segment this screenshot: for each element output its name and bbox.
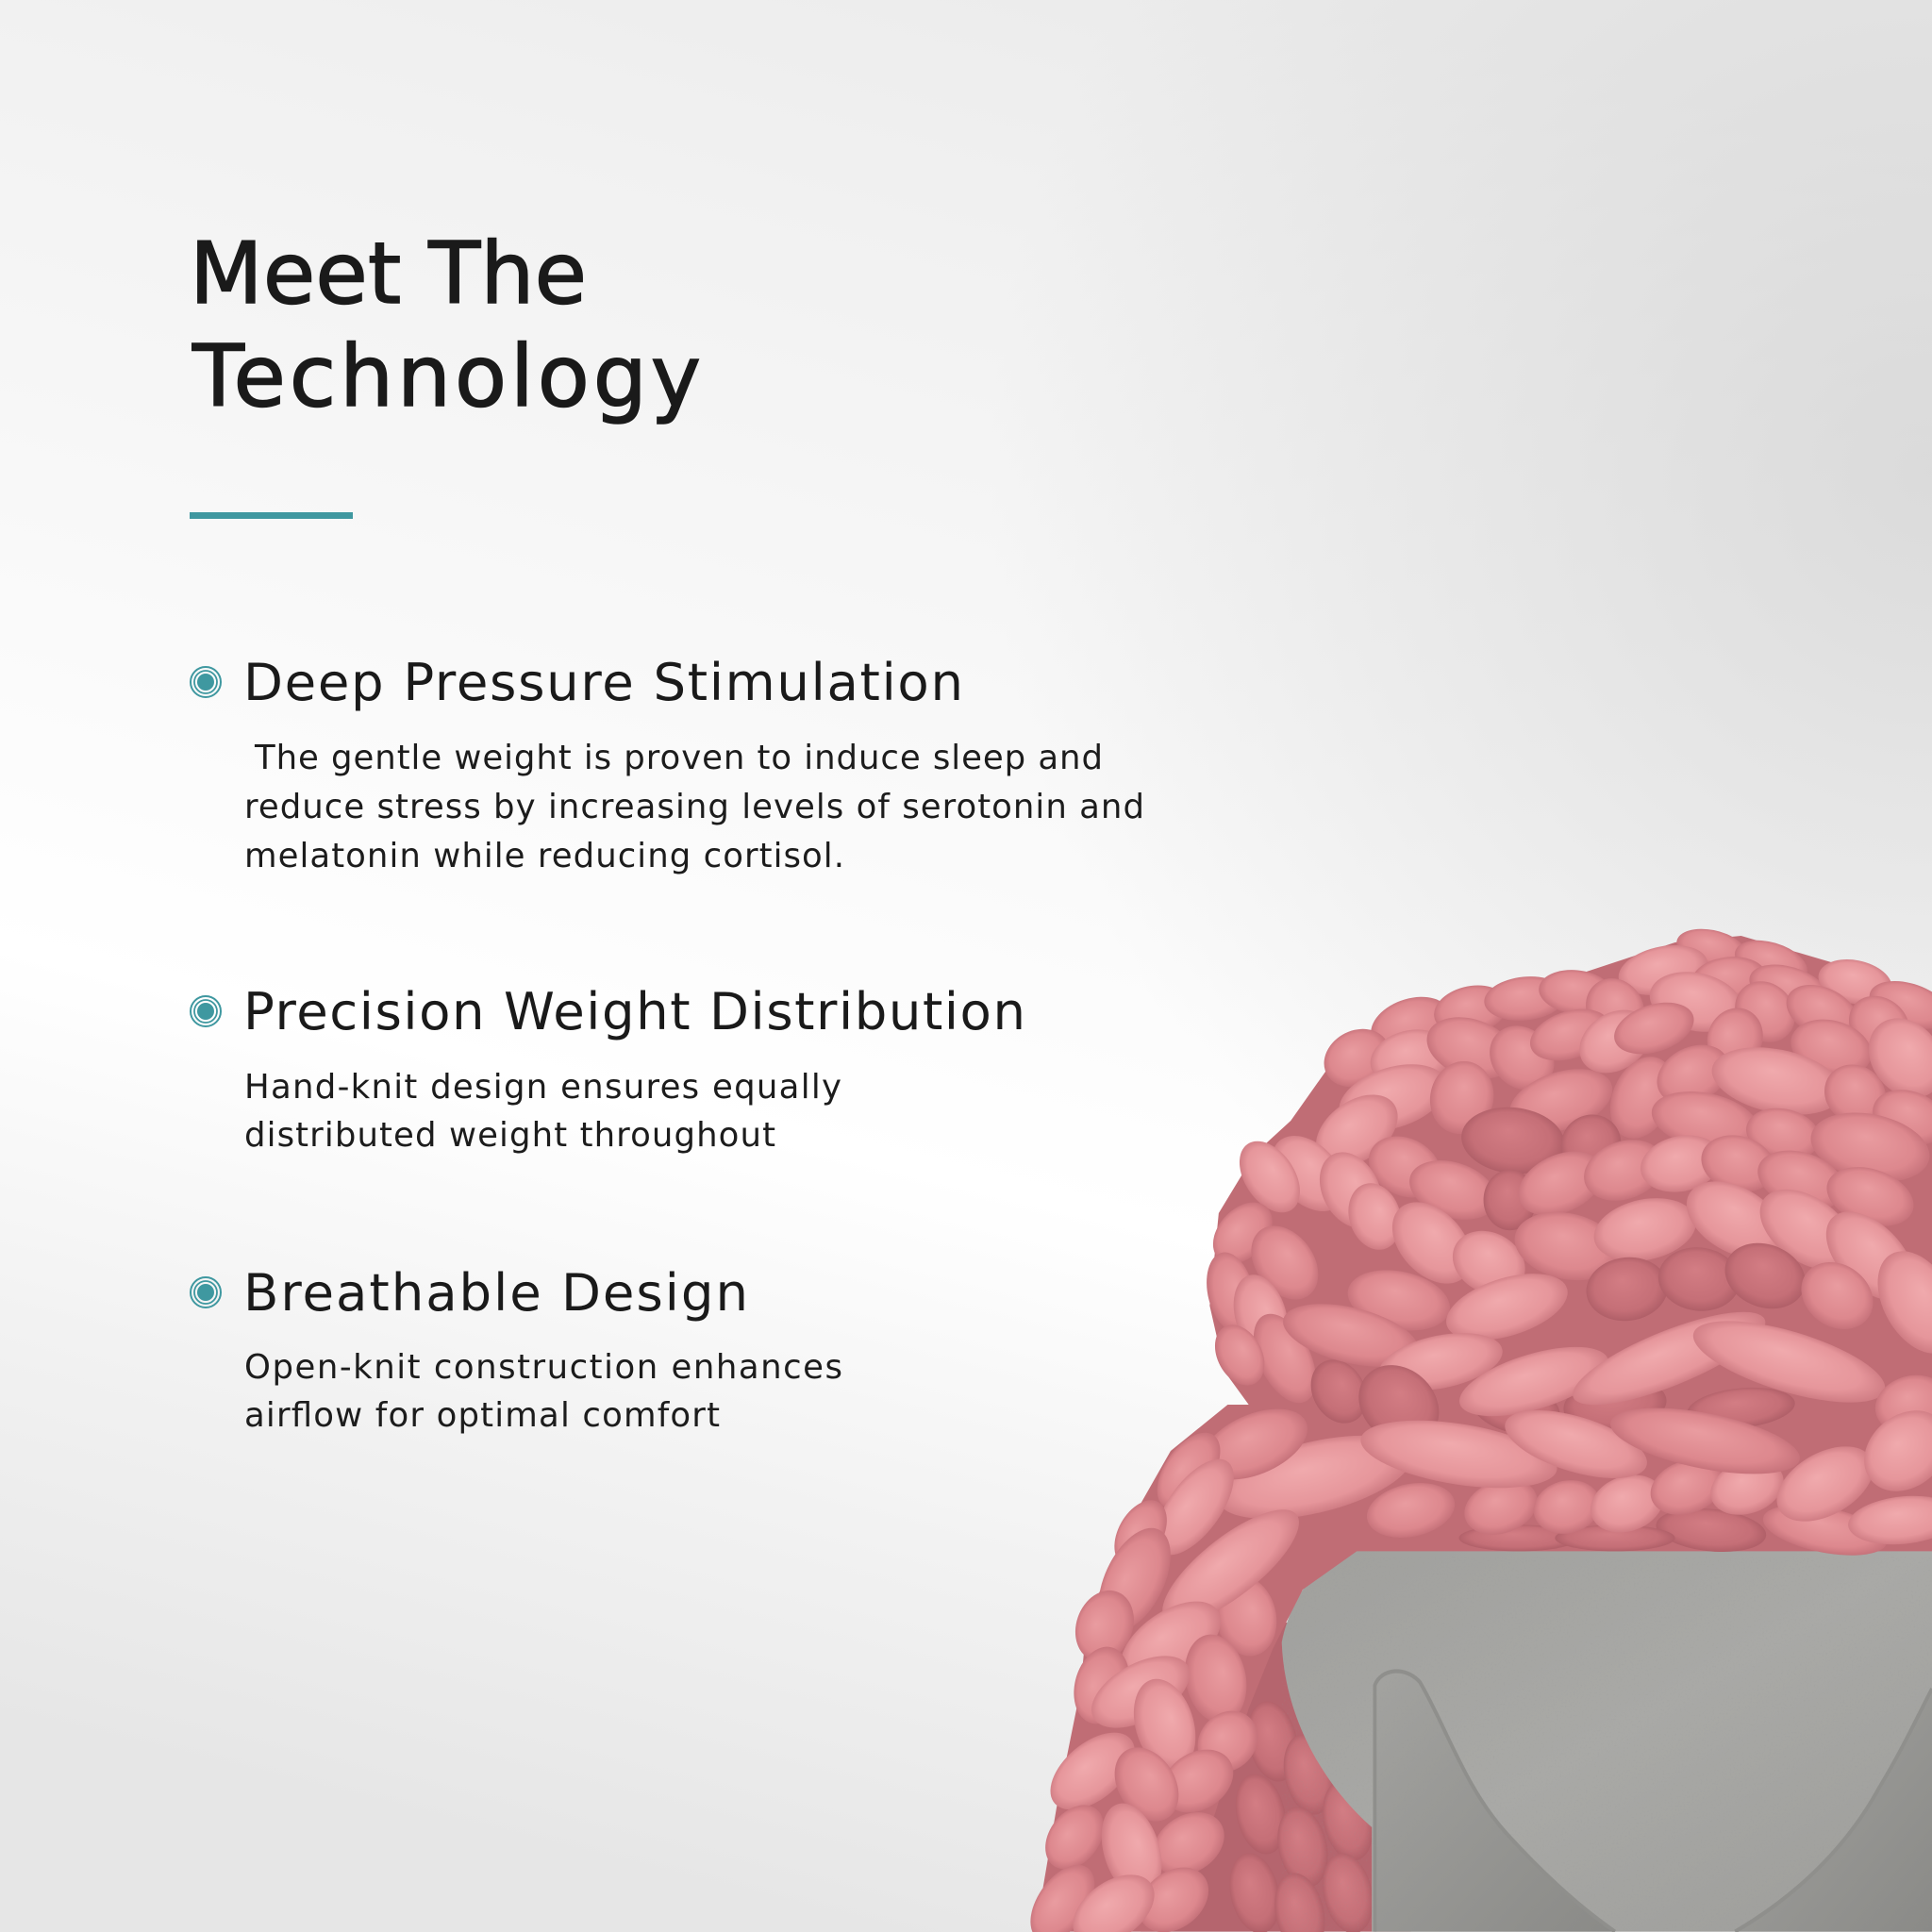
title: Meet The [190, 225, 587, 324]
description: Open-knit construction enhances [244, 1348, 842, 1387]
heading: Precision Weight Distribution [243, 981, 1025, 1041]
teal divider bar [190, 512, 353, 519]
blanket back drape [1141, 1623, 1411, 1932]
description: The gentle weight is proven to induce sleep and [254, 739, 1103, 777]
description: airflow for optimal comfort [244, 1396, 720, 1435]
middle S-curve braid [1258, 1080, 1932, 1370]
feature: breathable design [191, 1262, 842, 1435]
icon: target bullet [191, 996, 221, 1026]
feature: deep pressure stimulation [191, 652, 1144, 875]
photo: pink chunky knit blanket draped on concrete stool [1018, 924, 1932, 1932]
icon: target bullet [191, 667, 221, 697]
blanket silhouette [1036, 936, 1932, 1932]
description: Hand-knit design ensures equally [244, 1068, 841, 1107]
title [190, 225, 701, 426]
description: reduce stress by increasing levels of serotonin and [244, 788, 1144, 826]
description: melatonin while reducing cortisol. [244, 837, 844, 875]
description [244, 1348, 842, 1435]
lower strands [1278, 1292, 1932, 1459]
front band [1211, 1394, 1932, 1564]
description [244, 1068, 841, 1155]
heading: Breathable Design [243, 1262, 748, 1323]
hanging braid [1018, 1395, 1316, 1932]
description [244, 739, 1144, 875]
description: distributed weight throughout [244, 1116, 775, 1155]
concrete stool [1282, 1547, 1932, 1932]
title: Technology [192, 327, 701, 426]
left cascade [1199, 1128, 1378, 1436]
upper knit rows [1317, 924, 1932, 1191]
heading: Deep Pressure Stimulation [243, 652, 963, 712]
feature: precision weight distribution [191, 981, 1025, 1155]
icon: target bullet [191, 1277, 221, 1307]
